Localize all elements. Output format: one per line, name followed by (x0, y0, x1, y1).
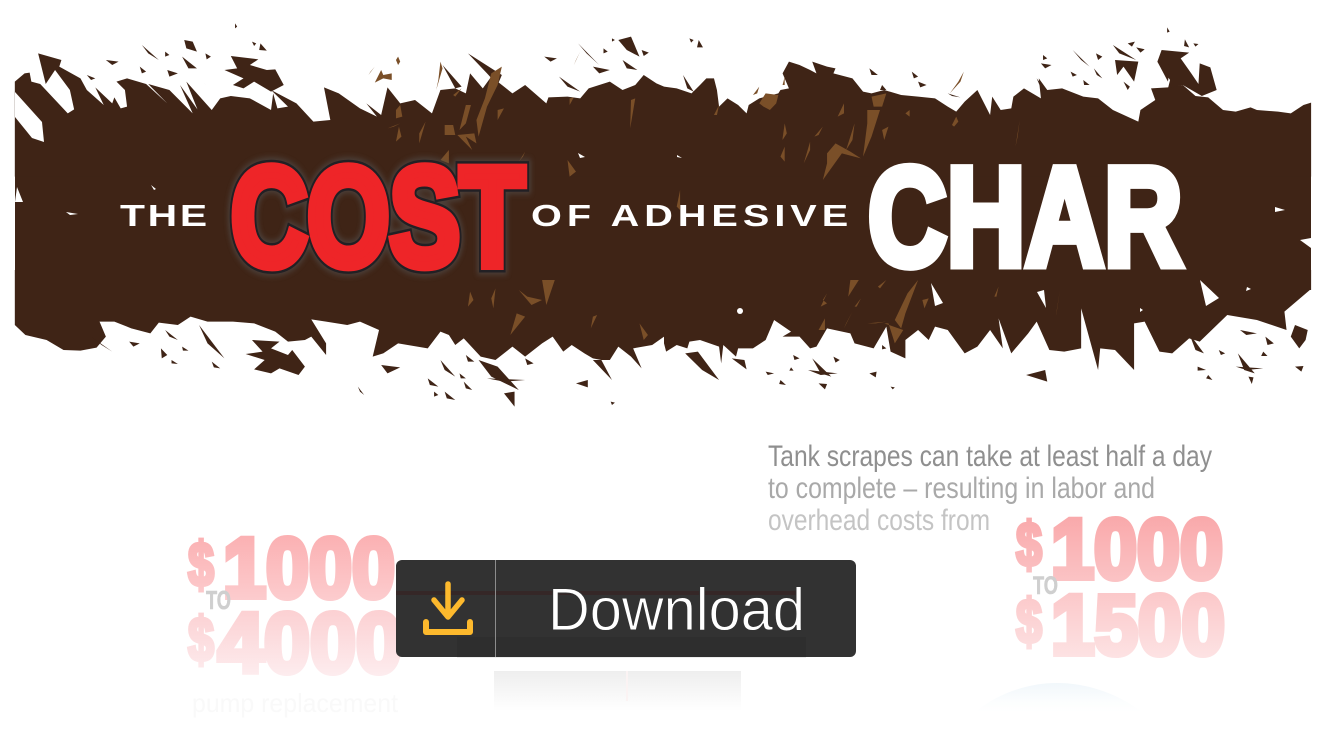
white cuts in band (15, 92, 1311, 314)
band top edge right (664, 27, 1311, 177)
band top edge left (15, 23, 664, 177)
brown streaks upper right (677, 72, 1020, 210)
caption: pump replacement: pump replacement (192, 688, 399, 718)
band bottom edge right (664, 270, 1311, 389)
stat: pump replacement cost (188, 521, 402, 718)
text block: tank scrapes: to complete – resulting in labor and (768, 472, 1155, 505)
amount: $1000: 1000 (223, 521, 395, 615)
title word: CHAR: CHAR (868, 138, 1183, 295)
amount: $4000: 4000 (218, 596, 402, 690)
stat: tank scrape cost (1016, 502, 1225, 672)
text block: tank scrapes: overhead costs from (768, 504, 990, 537)
char band banner (15, 23, 1311, 407)
title (120, 138, 1183, 295)
title word: COST: COST (231, 140, 525, 295)
brown streaks lower right (819, 280, 1060, 343)
brown streaks lower left (459, 280, 648, 340)
button label: Download (548, 576, 805, 643)
faded blue arc (975, 683, 1142, 712)
amount: $1000: $ (188, 531, 214, 600)
band bottom edge left (15, 270, 664, 407)
title word: COST: COST (231, 140, 525, 295)
amount: $1000: 1000 (1051, 502, 1223, 596)
text block: tank scrapes (768, 440, 1212, 537)
title word: THE: THE (120, 198, 207, 233)
icon: download arrow (426, 584, 470, 632)
text block: tank scrapes: Tank scrapes can take at least half a day (768, 440, 1212, 473)
label: TO: TO (206, 585, 231, 615)
faded chart blocks (494, 671, 741, 711)
amount: $1500: 1500 (1051, 578, 1225, 672)
label: TO: TO (1033, 572, 1058, 600)
amount: $1500: $ (1016, 588, 1042, 657)
amount: $4000: $ (188, 606, 214, 675)
title word: COST: COST (231, 140, 525, 295)
brown streaks upper left (368, 52, 635, 177)
title words: OF ADHESIVE: OF ADHESIVE (531, 199, 848, 233)
download button (396, 560, 856, 658)
amount: $1000: $ (1016, 511, 1042, 580)
